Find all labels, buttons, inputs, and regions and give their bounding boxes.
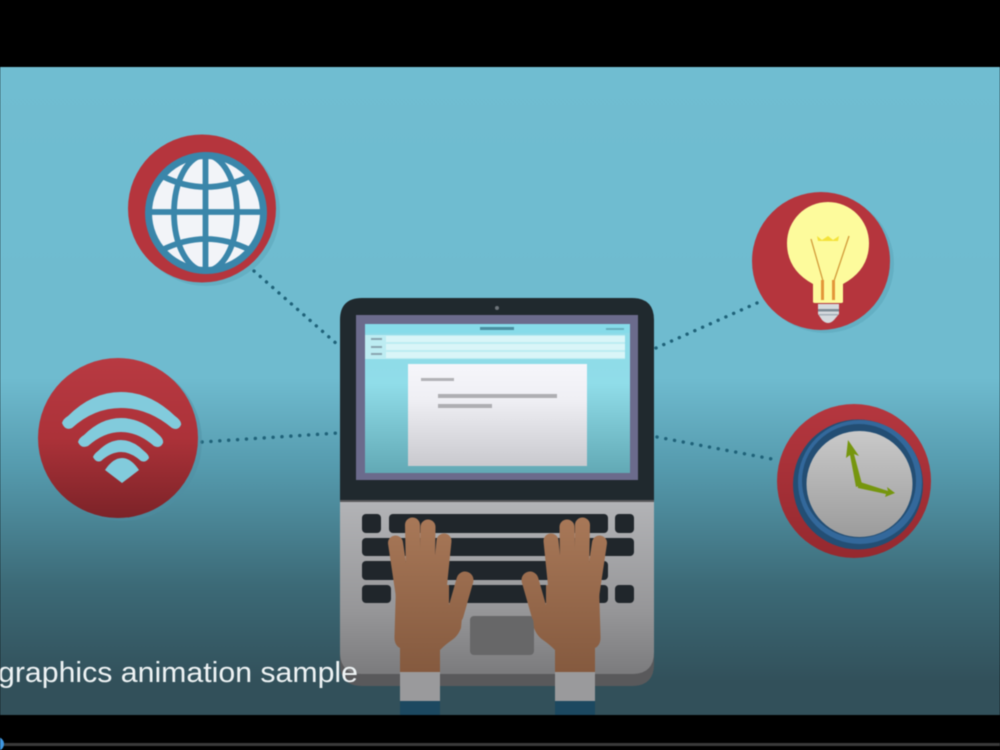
right sleeve (555, 672, 595, 701)
left cuff (400, 701, 440, 715)
icon: light bulb (752, 192, 894, 333)
dotted connector: wifi to laptop (202, 433, 338, 442)
clock hands (846, 440, 895, 497)
dotted connector: clock to laptop (657, 437, 777, 460)
webcam (495, 306, 499, 310)
clock face (806, 431, 912, 537)
dotted connector: globe to laptop (254, 271, 338, 345)
left sleeve (400, 672, 440, 701)
bottom black bar (0, 715, 1000, 750)
laptop base (340, 500, 654, 686)
right cuff (555, 701, 595, 715)
window title bar (365, 324, 630, 333)
icon: globe (128, 134, 280, 286)
caption text: graphics animation sample (0, 657, 358, 689)
laptop lid (340, 298, 654, 500)
keyboard (362, 514, 634, 603)
trackpad (470, 616, 534, 655)
document (408, 364, 587, 466)
document lines (421, 378, 454, 381)
icon: clock (777, 404, 931, 558)
icon: wifi (38, 358, 202, 521)
top black bar (0, 0, 1000, 67)
left hand (394, 525, 465, 715)
screen (365, 324, 630, 473)
dotted connector: bulb to laptop (656, 303, 757, 348)
laptop (340, 298, 654, 686)
progress bar (0, 737, 1000, 750)
right hand (530, 525, 601, 715)
screen bezel (356, 315, 638, 480)
toolbar rows (365, 335, 625, 359)
